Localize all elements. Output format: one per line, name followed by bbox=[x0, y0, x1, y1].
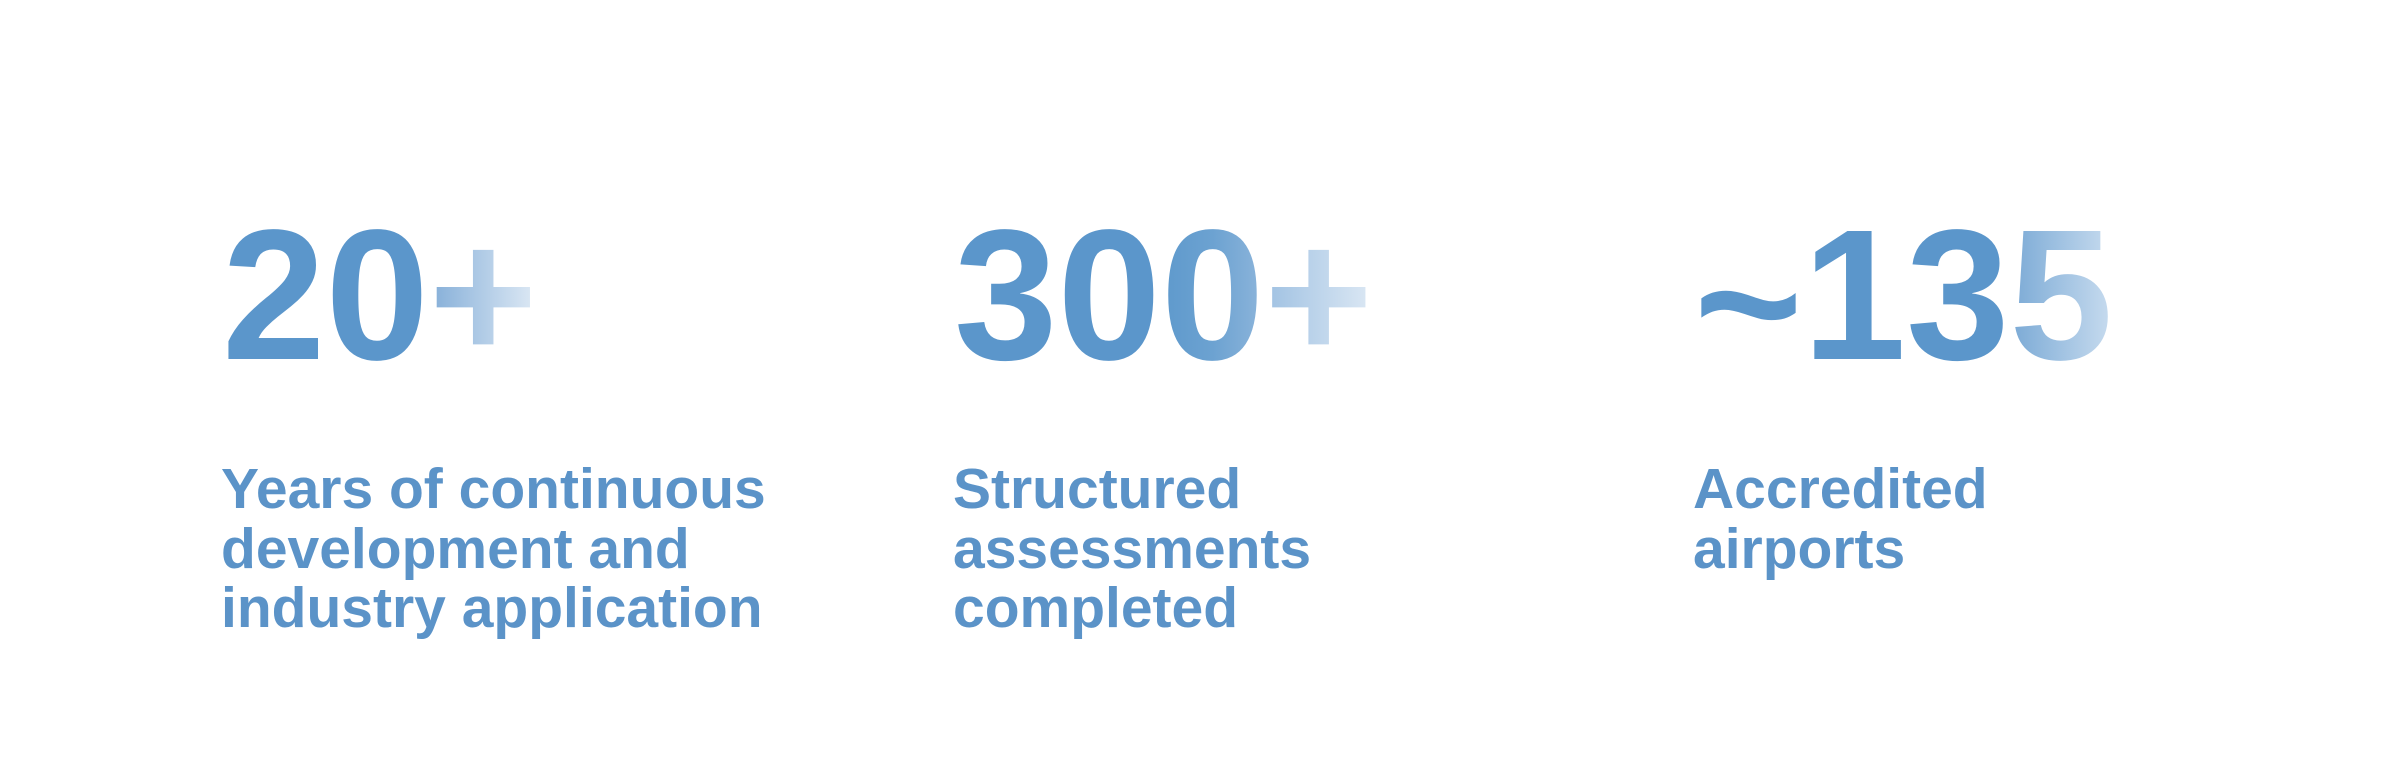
label: airports text: Accredited bbox=[1693, 457, 1988, 521]
number: ~135: 13 bbox=[1803, 192, 2010, 399]
label: assessments text: Structured bbox=[953, 457, 1241, 521]
number: 300+: 0 bbox=[1161, 192, 1264, 399]
number: 20+: + bbox=[429, 192, 538, 399]
label: years text: development and bbox=[221, 516, 690, 580]
number: ~135: 5 bbox=[2010, 192, 2113, 399]
label: years text: industry application bbox=[221, 576, 763, 640]
label: years text: Years of continuous bbox=[221, 457, 766, 521]
number: 300+: + bbox=[1264, 192, 1373, 399]
label: assessments text bbox=[953, 457, 1311, 640]
number: 20+: 20 bbox=[222, 192, 429, 399]
label: assessments text: completed bbox=[953, 576, 1238, 640]
number: ~135 bbox=[1694, 192, 2113, 407]
number: ~135: ~ bbox=[1694, 200, 1803, 407]
label: assessments text: assessments bbox=[953, 516, 1311, 580]
number: 300+ bbox=[954, 192, 1373, 399]
label: years text bbox=[221, 457, 766, 640]
label: airports text bbox=[1693, 457, 1988, 580]
number: 300+: 30 bbox=[954, 192, 1161, 399]
label: airports text: airports bbox=[1693, 516, 1905, 580]
number: 20+ bbox=[222, 192, 538, 399]
